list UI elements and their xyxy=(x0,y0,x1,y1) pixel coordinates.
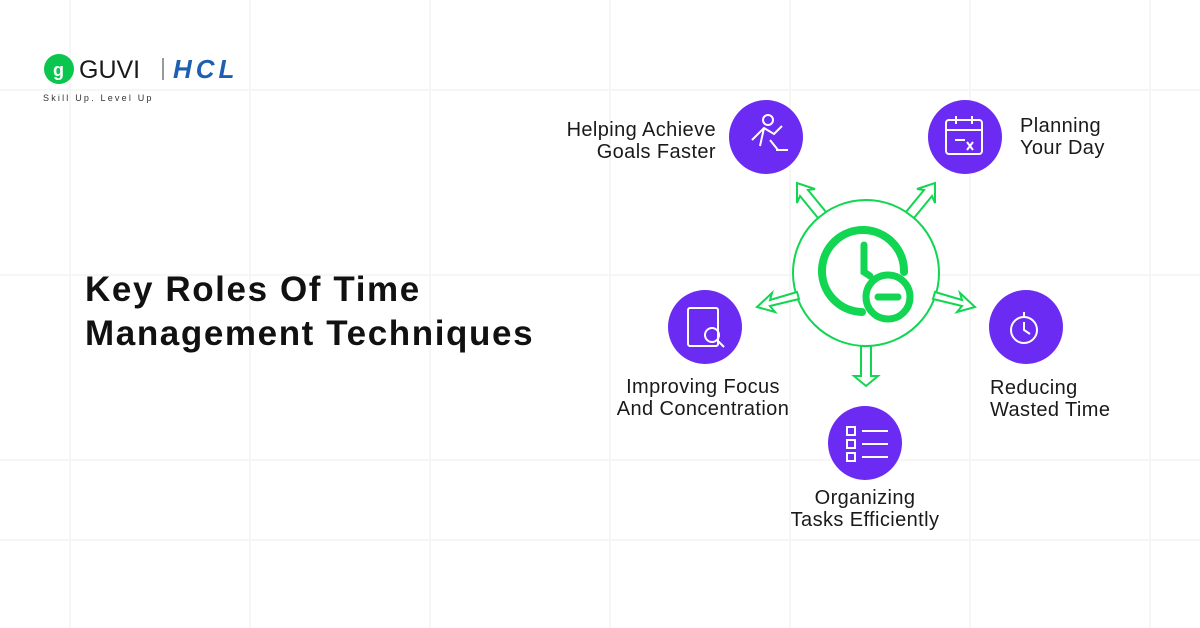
label: organizing xyxy=(791,487,939,531)
title xyxy=(85,270,534,353)
label: reducing xyxy=(990,377,1110,421)
logo: GUVI xyxy=(79,56,140,84)
purple icon circles xyxy=(668,100,1063,480)
label: organizing: Organizing xyxy=(815,487,915,509)
logo xyxy=(43,54,238,103)
label: reducing: Wasted Time xyxy=(990,399,1110,421)
clock icon xyxy=(822,230,910,319)
label: reducing: Reducing xyxy=(990,377,1078,399)
label: focus: And Concentration xyxy=(617,398,789,420)
title: Key Roles Of Time xyxy=(85,270,421,309)
logo: g xyxy=(53,60,64,80)
label: organizing: Tasks Efficiently xyxy=(791,509,939,531)
label: planning: Planning xyxy=(1020,115,1101,137)
label: planning: Your Day xyxy=(1020,137,1105,159)
logo: Skill Up. Level Up xyxy=(43,93,154,103)
label: helping xyxy=(567,119,716,163)
label: helping: Goals Faster xyxy=(597,141,716,163)
title: Management Techniques xyxy=(85,314,534,353)
logo: HCL xyxy=(173,54,238,84)
label: planning xyxy=(1020,115,1105,159)
label: focus xyxy=(616,376,789,420)
center hub xyxy=(757,183,975,386)
label: focus: Improving Focus xyxy=(626,376,780,398)
label: helping: Helping Achieve xyxy=(567,119,716,141)
